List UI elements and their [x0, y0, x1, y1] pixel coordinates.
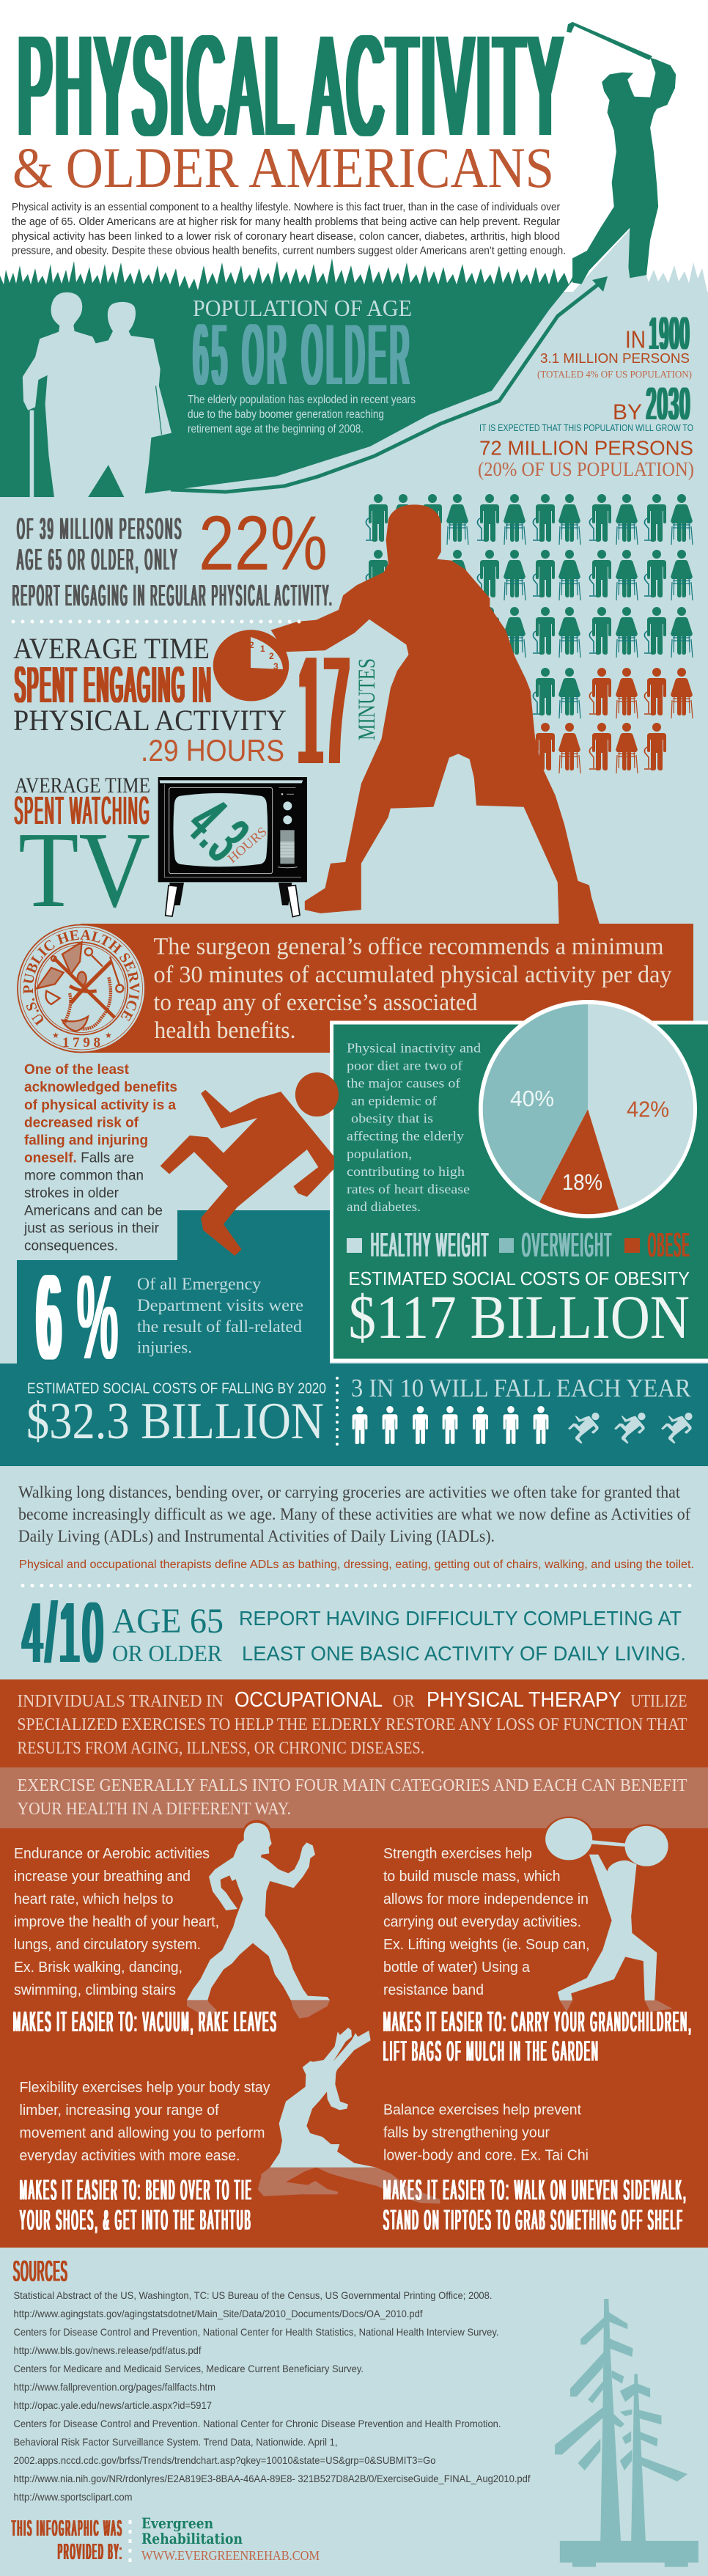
- credit: provided by: Evergreen: [141, 2514, 213, 2532]
- stat: in 1900: 3.1 MILLION PERSONS: [540, 351, 690, 366]
- icon: dancer silhouette: [258, 2028, 440, 2204]
- intro paragraph: pressure, and obesity. Despite these obvious health benefits, current numbers suggest older Americans aren’t getting enough.: [12, 245, 566, 257]
- obesity text: an epidemic of: [351, 1094, 437, 1108]
- sources list: http://opac.yale.edu/news/article.aspx?id=5917: [13, 2399, 212, 2411]
- stat: 22 percent report engaging: [12, 501, 333, 612]
- stat: by 2030: 72 MILLION PERSONS: [479, 437, 693, 459]
- banner: surgeon general recommendation: [81, 924, 693, 1053]
- credit: provided by: THIS INFOGRAPHIC WAS: [12, 2515, 123, 2541]
- banner: surgeon general recommendation: of 30 minutes of accumulated physical activity per day: [154, 962, 672, 988]
- intro paragraph: the age of 65. Older Americans are at higher risk for many health problems that being active can help prevent. Regular: [12, 216, 560, 228]
- text: occupational or physical therapy: OCCUPATIONAL: [235, 1688, 383, 1712]
- icon: public health service seal: 1798: [62, 1035, 100, 1050]
- stat: 22 percent report engaging: AGE 65 OR OLDER, ONLY: [17, 542, 179, 576]
- text: endurance exercises: lungs, and circulatory system.: [14, 1937, 201, 1953]
- stat: average time physical activity: SPENT ENGAGING IN: [15, 656, 213, 713]
- text: endurance exercises: Endurance or Aerobic activities: [14, 1846, 210, 1862]
- stat: 4 in 10: LEAST ONE BASIC ACTIVITY OF DAILY LIVING.: [242, 1642, 686, 1665]
- icon: elderly couple silhouette: [23, 292, 172, 497]
- icon: clock face on ball: 1: [260, 644, 265, 654]
- obesity text: [347, 1041, 481, 1214]
- text: flexibility exercises: [19, 2080, 270, 2236]
- pie chart: weight categories: [479, 1000, 697, 1218]
- text: strength exercises: resistance band: [383, 1982, 484, 1998]
- text: occupational or physical therapy: OR: [393, 1692, 415, 1711]
- text: activities of daily living: become increasingly difficult as we age. Many of these activities are what we now define as Activities of: [18, 1505, 690, 1523]
- sources list: http://www.bls.gov/news.release/pdf/atus.pdf: [13, 2344, 202, 2356]
- text: SPENT WATCHING: [15, 789, 151, 833]
- heading: population of age: POPULATION OF AGE: [193, 295, 412, 321]
- text: benefits of physical activity: oneself. Falls are: [24, 1151, 134, 1166]
- population text: due to the baby boomer generation reaching: [188, 408, 384, 421]
- sources list: http://www.nia.nih.gov/NR/rdonlyres/E2A819E3-8BAA-46AA-89E8- 321B527D8A2B/0/ExerciseGuide_FINAL_Aug2010.pdf: [13, 2473, 531, 2484]
- icon: clock face on ball: 2: [269, 651, 274, 661]
- text: benefits of physical activity: more common than: [24, 1169, 144, 1183]
- pie chart: weight categories: 18%: [562, 1169, 602, 1195]
- obesity text: the major causes of: [347, 1076, 460, 1091]
- text: activities of daily living: [18, 1483, 694, 1571]
- text: strength exercises: carrying out everyday activities.: [383, 1914, 581, 1930]
- banner: surgeon general recommendation: health benefits.: [154, 1017, 296, 1044]
- intro paragraph: [12, 201, 566, 257]
- text: benefits of physical activity: One of the least: [24, 1062, 130, 1078]
- population text: [188, 394, 416, 435]
- panel: exercise section background: [0, 1679, 708, 2248]
- banner: surgeon general recommendation: The surgeon general’s office recommends a minimum: [154, 934, 664, 960]
- pie chart: weight categories: 40%: [510, 1086, 554, 1111]
- panel: teal band falling costs: $32.3 BILLION: [26, 1393, 324, 1450]
- icon: golfer silhouette: [567, 22, 676, 284]
- obesity text: affecting the elderly: [347, 1129, 464, 1144]
- credit: provided by: WWW.EVERGREENREHAB.COM: [141, 2548, 320, 2563]
- sources list: Centers for Medicare and Medicaid Services, Medicare Current Beneficiary Survey.: [13, 2363, 364, 2374]
- stat: 4 in 10: [23, 1585, 686, 1680]
- panel: teal falls block: Of all Emergency: [137, 1275, 262, 1293]
- credit: provided by: [12, 2514, 320, 2564]
- population text: retirement age at the beginning of 2008.: [188, 423, 364, 435]
- intro paragraph: Physical activity is an essential component to a healthy lifestyle. Nowhere is this fact truer, than in the case of individuals over: [12, 201, 560, 213]
- text: occupational or physical therapy: INDIVIDUALS TRAINED IN: [18, 1692, 224, 1711]
- text: benefits of physical activity: strokes in older: [24, 1186, 119, 1201]
- stat: 4 in 10: OR OLDER: [112, 1640, 223, 1666]
- text: activities of daily living: Physical and occupational therapists define ADLs as bathing, dressing, eating, getting out of chairs, walking, and using the toilet.: [19, 1559, 694, 1571]
- obesity text: rates of heart disease: [347, 1182, 470, 1196]
- text: benefits of physical activity: decreased risk of: [24, 1116, 139, 1130]
- text: 17: [299, 625, 352, 796]
- stat: 4 in 10: AGE 65: [112, 1602, 224, 1641]
- stat: in 1900: IN: [625, 325, 646, 353]
- hill and light grass: [572, 228, 708, 308]
- sources list: Statistical Abstract of the US, Washington, TC: US Bureau of the Census, US Governmental Printing Office; 2008.: [13, 2289, 493, 2301]
- icon: falling person: [161, 1072, 339, 1256]
- panel: teal falls block: 6: [37, 1250, 60, 1384]
- obesity text: poor diet are two of: [347, 1059, 462, 1073]
- icon: public health service seal: ★: [52, 1031, 59, 1040]
- text: strength exercises: [383, 1846, 693, 2067]
- icon: clock face on ball: 2: [249, 640, 254, 650]
- stat: 4 in 10: 4/10: [23, 1585, 106, 1680]
- text: strength exercises: bottle of water) Using a: [383, 1959, 531, 1976]
- text: strength exercises: Strength exercises help: [383, 1846, 532, 1862]
- sources list: http://www.agingstats.gov/agingstatsdotnet/Main_Site/Data/2010_Documents/Docs/OA_2010.pdf: [13, 2308, 423, 2319]
- stat: average time watching tv: [15, 773, 151, 930]
- text: flexibility exercises: Flexibility exercises help your body stay: [19, 2080, 270, 2096]
- sources list: 2002.apps.nccd.cdc.gov/brfss/Trends/trendchart.asp?qkey=10010&state=US&grp=0&SUBMIT3=Go: [13, 2454, 436, 2466]
- panel: teal falls block: injuries.: [137, 1339, 192, 1356]
- obesity text: Physical inactivity and: [347, 1041, 481, 1056]
- text: strength exercises: to build muscle mass, which: [383, 1869, 560, 1885]
- panel: teal band falling costs: ESTIMATED SOCIAL COSTS OF FALLING BY 2020: [27, 1381, 326, 1397]
- stat: in 1900: [537, 309, 692, 380]
- text: endurance exercises: swimming, climbing stairs: [14, 1982, 176, 1998]
- panel: teal band falling costs: 3 IN 10 WILL FALL EACH YEAR: [351, 1374, 691, 1402]
- stat: average time physical activity: AVERAGE TIME: [13, 632, 210, 665]
- stat: average time watching tv: TV: [18, 810, 150, 930]
- sources list: http://www.fallprevention.org/pages/fallfacts.htm: [13, 2381, 215, 2393]
- intro paragraph: physical activity has been linked to a lower risk of coronary heart disease, colon cancer, diabetes, arthritis, high blood: [12, 230, 560, 243]
- stat: 22 percent report engaging: 22%: [199, 501, 328, 586]
- arrow: population growth: [171, 276, 608, 492]
- sources list: [13, 2289, 531, 2503]
- icon: clock face on ball: [249, 637, 283, 671]
- text: occupational or physical therapy: UTILIZE: [630, 1692, 687, 1711]
- obesity text: and diabetes.: [347, 1199, 421, 1214]
- sources list: Behavioral Risk Factor Surveillance System. Trend Data, Nationwide. April 1,: [13, 2436, 337, 2448]
- text: balance exercises: lower-body and core. Ex. Tai Chi: [383, 2148, 589, 2164]
- sources list: Centers for Disease Control and Prevention, National Center for Health Statistics, National Health Interview Survey.: [13, 2326, 498, 2338]
- text: benefits of physical activity: consequences.: [24, 1239, 118, 1254]
- stat: 22 percent report engaging: OF 39 MILLION PERSONS: [17, 512, 183, 545]
- text: benefits of physical activity: just as serious in their: [23, 1221, 160, 1236]
- credit: provided by: PROVIDED BY:: [58, 2539, 123, 2564]
- text: balance exercises: Balance exercises help prevent: [383, 2102, 581, 2119]
- text: activities of daily living: Walking long distances, bending over, or carrying groceries are activities we often take for granted that: [18, 1483, 681, 1501]
- stat: by 2030: (20% OF US POPULATION): [478, 458, 694, 480]
- pictogram: people grid: [366, 494, 693, 773]
- icon: television: 4.3: [174, 785, 265, 876]
- stat: average time physical activity: [13, 625, 380, 796]
- credit: provided by: Rehabilitation: [141, 2530, 243, 2547]
- obesity text: obesity that is: [351, 1111, 433, 1126]
- obesity text: population,: [347, 1147, 412, 1161]
- text: flexibility exercises: limber, increasing your range of: [19, 2102, 219, 2119]
- text: flexibility exercises: movement and allowing you to perform: [19, 2125, 265, 2141]
- stat: average time physical activity: PHYSICAL ACTIVITY: [13, 704, 287, 737]
- green grass and hillside: [0, 258, 579, 497]
- stat: by 2030: BY: [613, 400, 642, 424]
- sources list: http://www.sportsclipart.com: [13, 2491, 132, 2503]
- icon: weightlifter silhouette: [543, 1817, 673, 2012]
- icon: clock face on ball: 3: [273, 661, 279, 671]
- panel: obesity: [331, 1000, 708, 1361]
- panel: teal falls block: [17, 1210, 330, 1384]
- text: balance exercises: [383, 2102, 687, 2236]
- text: endurance exercises: heart rate, which helps to: [14, 1891, 173, 1907]
- text: occupational or physical therapy: [18, 1688, 687, 1758]
- stat: 4 in 10: REPORT HAVING DIFFICULTY COMPLETING AT: [239, 1607, 682, 1630]
- pie chart: weight categories: 42%: [627, 1097, 669, 1122]
- icon: evergreen trees: [555, 2299, 698, 2567]
- stat: average time physical activity: .29 HOURS: [141, 733, 284, 768]
- text: benefits of physical activity: falling and injuring: [24, 1133, 148, 1148]
- stat: by 2030: [478, 379, 694, 480]
- stat: in 1900: (TOTALED 4% OF US POPULATION): [537, 369, 692, 380]
- text: SOURCES: [13, 2255, 68, 2287]
- text: benefits of physical activity: of physical activity is a: [24, 1098, 176, 1113]
- text: endurance exercises: improve the health of your heart,: [14, 1914, 219, 1930]
- banner: surgeon general recommendation: to reap any of exercise’s associated: [154, 990, 478, 1016]
- text: benefits of physical activity: [23, 1062, 177, 1254]
- text: endurance exercises: Ex. Brisk walking, dancing,: [14, 1959, 182, 1976]
- text: benefits of physical activity: Americans and can be: [24, 1204, 163, 1218]
- text: strength exercises: allows for more independence in: [383, 1891, 589, 1907]
- icon: basketball player silhouette: [213, 504, 600, 924]
- text: four categories: [18, 1776, 687, 1819]
- panel: teal falls block: the result of fall-related: [137, 1317, 303, 1336]
- panel: teal falls block: Department visits were: [137, 1296, 303, 1314]
- stat: average time watching tv: AVERAGE TIME: [15, 773, 150, 798]
- icon: public health service seal: U.S. PUBLIC HEALTH SERVICE: [23, 930, 139, 1026]
- text: endurance exercises: increase your breathing and: [14, 1869, 191, 1885]
- subtitle: older americans: & OLDER AMERICANS: [12, 136, 554, 199]
- icon: television: HOURS: [225, 824, 270, 866]
- text: benefits of physical activity: acknowledged benefits: [24, 1080, 177, 1095]
- text: flexibility exercises: everyday activities with more ease.: [19, 2148, 240, 2164]
- icon: walker silhouette: [187, 1820, 330, 2020]
- text: occupational or physical therapy: PHYSICAL THERAPY: [427, 1688, 622, 1712]
- text: balance exercises: falls by strengthening your: [383, 2124, 550, 2141]
- panel: teal falls block: %: [77, 1250, 118, 1384]
- text: four categories: YOUR HEALTH IN A DIFFERENT WAY.: [18, 1800, 291, 1819]
- pictogram: 3 in 10 fall: [353, 1406, 693, 1444]
- panel: teal band falling costs: [0, 1364, 708, 1466]
- text: endurance exercises: [13, 1846, 278, 2038]
- sources list: Centers for Disease Control and Prevention. National Center for Chronic Disease Prevention and Health Promotion.: [13, 2418, 501, 2429]
- stat: average time physical activity: MINUTES: [354, 658, 380, 740]
- icon: public health service seal: ★: [105, 1031, 112, 1040]
- text: activities of daily living: Daily Living (ADLs) and Instrumental Activities of Daily Living (IADLs).: [18, 1527, 495, 1545]
- obesity text: contributing to high: [347, 1164, 465, 1179]
- population text: The elderly population has exploded in recent years: [188, 394, 416, 406]
- text: strength exercises: Ex. Lifting weights (ie. Soup can,: [383, 1937, 589, 1953]
- text: occupational or physical therapy: RESULTS FROM AGING, ILLNESS, OR CHRONIC DISEASES.: [18, 1739, 424, 1758]
